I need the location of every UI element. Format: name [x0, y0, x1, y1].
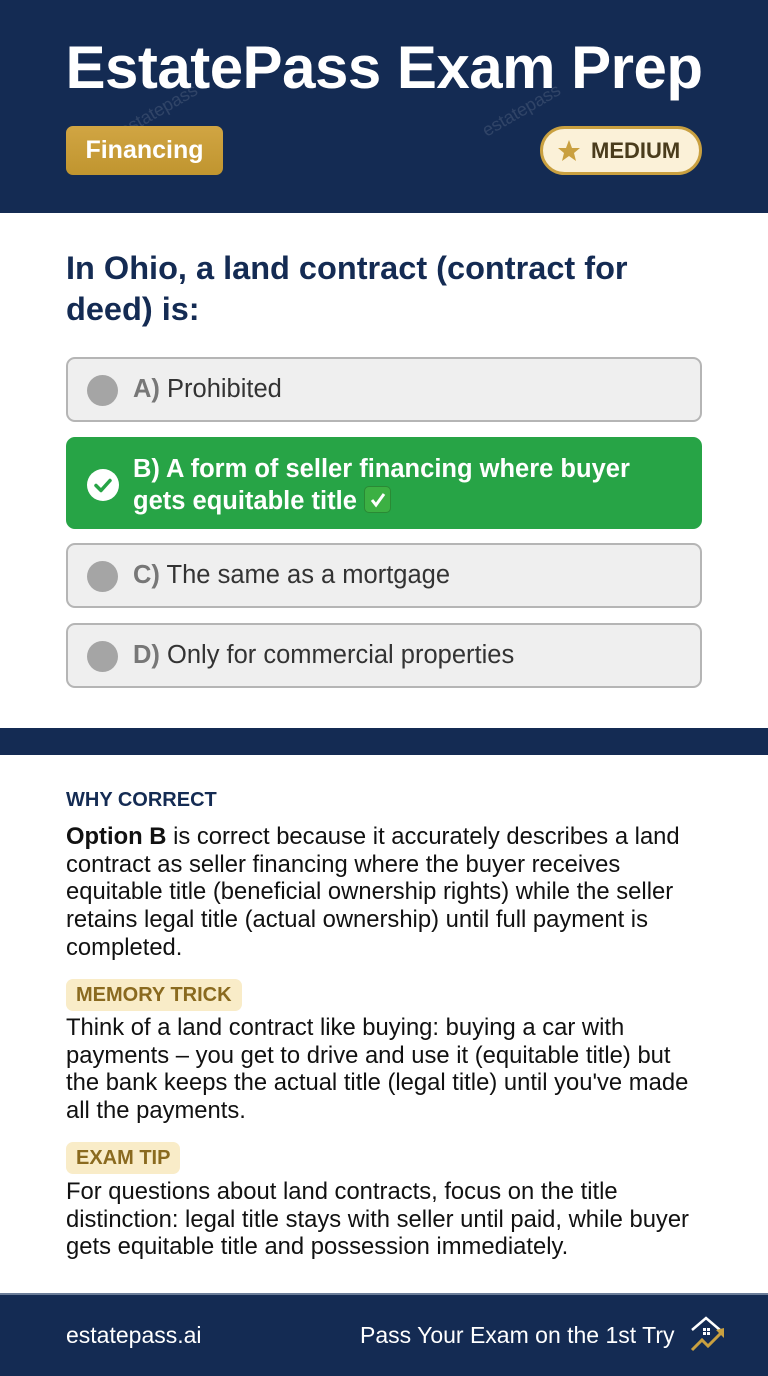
exam tip text: distinction: legal title stays with seller until paid, while buyer: [66, 1206, 689, 1233]
question: In Ohio, a land contract (contract for: [66, 250, 628, 286]
why correct text: Option B is correct because it accurately describes a land: [66, 823, 680, 850]
exam tip text: For questions about land contracts, focus on the title: [66, 1178, 618, 1205]
title: EstatePass Exam Prep: [65, 34, 703, 101]
exam tip tag: [66, 1142, 180, 1174]
icon: house with growth arrow: [691, 1316, 724, 1351]
footer: [0, 1293, 768, 1376]
footer url: estatepass.ai: [66, 1322, 202, 1348]
memory trick text: the bank keeps the actual title (legal title) until you've made: [66, 1069, 688, 1096]
memory trick text: payments – you get to drive and use it (equitable title) but: [66, 1042, 671, 1069]
option A: [66, 357, 702, 422]
option C: C) The same as a mortgage: [133, 561, 450, 589]
text: estatepass: [479, 80, 564, 140]
memory trick tag: [66, 979, 242, 1011]
option D: D) Only for commercial properties: [133, 641, 514, 669]
memory trick text: [66, 1014, 688, 1124]
why correct text: [66, 823, 680, 961]
memory trick text: all the payments.: [66, 1097, 246, 1124]
question: [66, 250, 628, 327]
why correct heading: WHY CORRECT: [66, 789, 217, 811]
difficulty badge: MEDIUM: [591, 138, 680, 163]
why correct text: completed.: [66, 934, 182, 961]
difficulty badge: [540, 126, 702, 175]
why correct text: contract as seller financing where the buyer receives: [66, 851, 620, 878]
category badge: [66, 126, 223, 175]
exam tip text: gets equitable title and possession immediately.: [66, 1233, 568, 1260]
option D: [66, 623, 702, 688]
exam tip tag: EXAM TIP: [76, 1147, 170, 1169]
option A: A) Prohibited: [133, 375, 282, 403]
text: estatepass: [116, 80, 201, 140]
why correct text: equitable title (beneficial ownership rights) while the seller: [66, 878, 673, 905]
exam tip text: [66, 1178, 689, 1260]
option B correct: gets equitable title: [133, 487, 357, 515]
question: deed) is:: [66, 291, 200, 327]
footer tagline: Pass Your Exam on the 1st Try: [360, 1322, 674, 1348]
memory trick text: Think of a land contract like buying: buying a car with: [66, 1014, 624, 1041]
option B correct: [66, 437, 702, 529]
option B correct: B) A form of seller financing where buyer: [133, 455, 630, 483]
option C: [66, 543, 702, 608]
why correct text: retains legal title (actual ownership) until full payment is: [66, 906, 648, 933]
category badge: Financing: [85, 136, 204, 164]
memory trick tag: MEMORY TRICK: [76, 984, 232, 1006]
header: [0, 0, 768, 213]
